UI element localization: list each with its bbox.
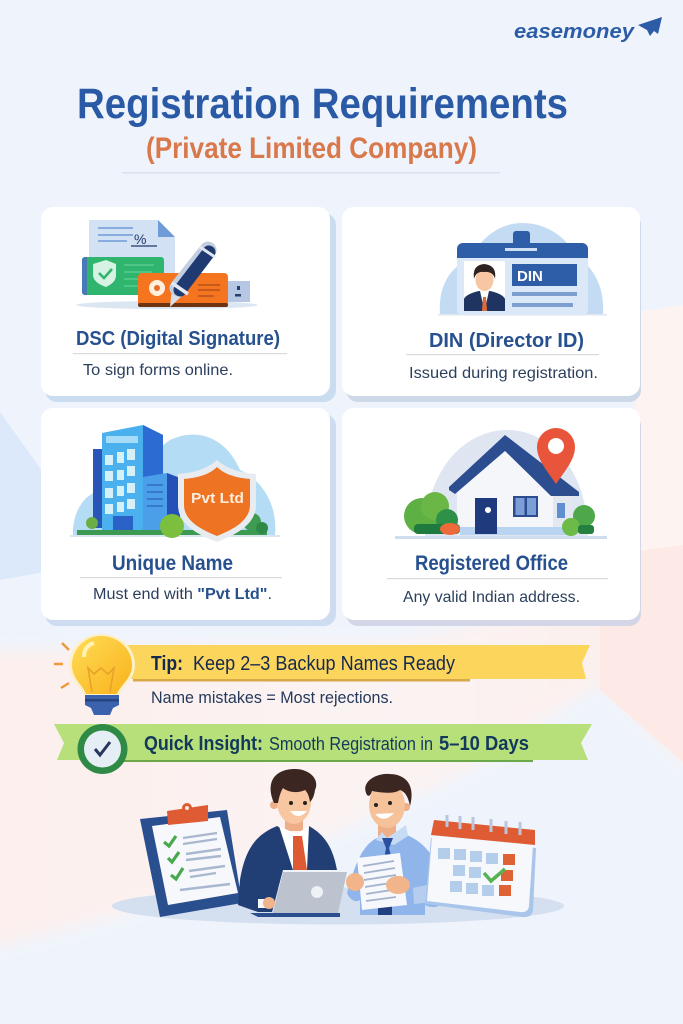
icon: laptop <box>250 872 347 917</box>
quick insight banner <box>54 724 592 774</box>
heading: DSC (Digital Signature) <box>76 328 280 350</box>
figure: man in blue shirt <box>346 774 447 915</box>
icon: clock <box>78 724 128 774</box>
title: Registration Requirements <box>77 80 568 128</box>
icon: ID badge: DIN <box>517 268 543 285</box>
heading: Registered Office <box>415 552 568 575</box>
heading: DIN (Director ID) <box>429 330 584 352</box>
panel: DSC <box>41 207 336 402</box>
tip banner <box>54 634 590 715</box>
subtitle: (Private Limited Company) <box>146 132 477 165</box>
icon: clipboard <box>140 803 242 917</box>
description: To sign forms online. <box>83 362 233 379</box>
tip text: Keep 2–3 Backup Names Ready <box>193 653 455 675</box>
panel: Registered Office <box>342 408 641 626</box>
icon: calendar <box>425 815 536 917</box>
tip note: Name mistakes = Most rejections. <box>151 689 393 707</box>
icon: light bulb <box>54 634 135 715</box>
figure: man in suit <box>238 769 337 912</box>
icon: house with location pin <box>395 428 607 539</box>
icon: building with shield: Pvt Ltd <box>191 490 244 507</box>
insight text <box>144 733 529 755</box>
description: Must end with "Pvt Ltd". <box>93 586 272 603</box>
icon: ID badge <box>438 223 607 316</box>
insight text: 5–10 Days <box>439 733 529 755</box>
icon: digital signature: % <box>134 231 146 247</box>
icon: building with shield <box>70 425 280 542</box>
insight text: Smooth Registration in <box>269 734 433 754</box>
logo: easemoney <box>514 17 662 43</box>
illustration: team with checklist and calendar <box>112 769 564 924</box>
panel: DIN <box>342 207 641 402</box>
heading: Unique Name <box>112 552 233 575</box>
logo: easemoney: easemoney <box>514 21 635 43</box>
description: Any valid Indian address. <box>403 589 580 606</box>
panel: Unique Name <box>41 408 336 626</box>
icon: digital signature <box>76 220 258 309</box>
insight text: Quick Insight: <box>144 733 263 755</box>
description: Issued during registration. <box>409 365 598 382</box>
tip text: Tip: <box>151 653 183 675</box>
